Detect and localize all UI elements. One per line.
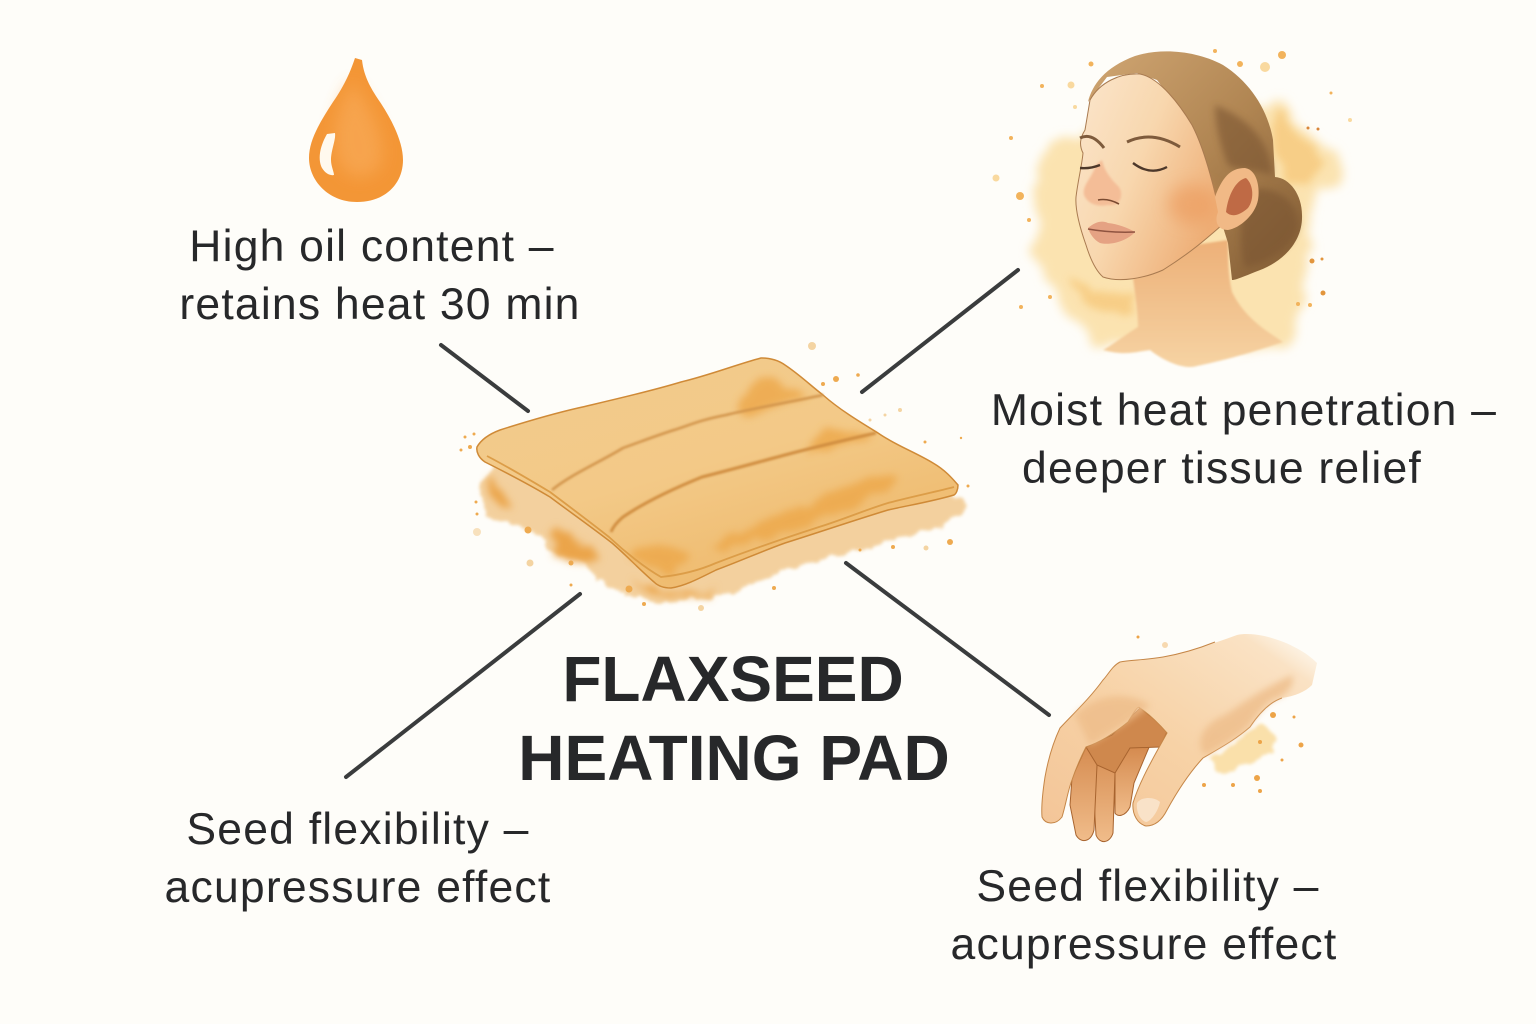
paint specks around pad (460, 342, 970, 611)
text: seed flexibility left: acupressure effect (165, 863, 551, 912)
orange stains (484, 482, 720, 597)
text: high oil content: retains heat 30 min (179, 280, 581, 329)
text: seed flexibility right: acupressure effect (951, 920, 1337, 969)
paint specks around hand (1136, 636, 1304, 793)
pinky and ring fingers (1115, 745, 1150, 815)
text: moist heat penetration: Moist heat penetration – (991, 386, 1497, 435)
icon: heating pad (460, 342, 970, 611)
text: seed flexibility left: Seed flexibility – (186, 805, 530, 854)
title: HEATING PAD (518, 722, 950, 794)
text: high oil content (179, 222, 581, 329)
back of hand, index finger, thumb and wrist (1042, 634, 1317, 826)
hair and bun (1088, 51, 1302, 280)
neck (1103, 240, 1283, 367)
face (1076, 74, 1222, 280)
thumbnail (1137, 798, 1160, 822)
paint specks around face (992, 49, 1352, 309)
text: seed flexibility right: Seed flexibility – (976, 862, 1320, 911)
icon: relaxed hand (1042, 634, 1317, 842)
title (518, 643, 950, 794)
hand shading (1075, 675, 1293, 755)
pad body (477, 358, 958, 588)
darker watercolor patches on pad (625, 378, 897, 573)
nose (1084, 160, 1121, 206)
ear (1215, 168, 1259, 230)
closed eyes (1080, 163, 1167, 171)
pad border stitching (487, 456, 954, 577)
icon: oil drop (309, 58, 403, 202)
text: moist heat penetration: deeper tissue relief (1022, 444, 1422, 493)
connector lines (346, 270, 1049, 777)
watercolor wash behind face (1034, 100, 1342, 345)
watercolor splash under pad (479, 430, 965, 602)
wash behind hand (1210, 725, 1276, 771)
title: FLAXSEED (562, 643, 904, 715)
deeper wash patches (1065, 110, 1325, 316)
text: moist heat penetration (991, 386, 1497, 493)
cheek blush (1168, 184, 1216, 224)
dark hair shading (1215, 105, 1298, 268)
text: seed flexibility left (165, 805, 551, 912)
text: seed flexibility right (951, 862, 1337, 969)
text: high oil content: High oil content – (189, 222, 555, 271)
pad seams (552, 395, 823, 490)
eyebrows (1080, 136, 1180, 148)
icon: woman's face with eyes closed (992, 49, 1352, 367)
middle finger (1070, 740, 1115, 841)
lips (1088, 222, 1135, 244)
hand outline (1042, 642, 1282, 826)
shadowed palm (1086, 708, 1168, 773)
